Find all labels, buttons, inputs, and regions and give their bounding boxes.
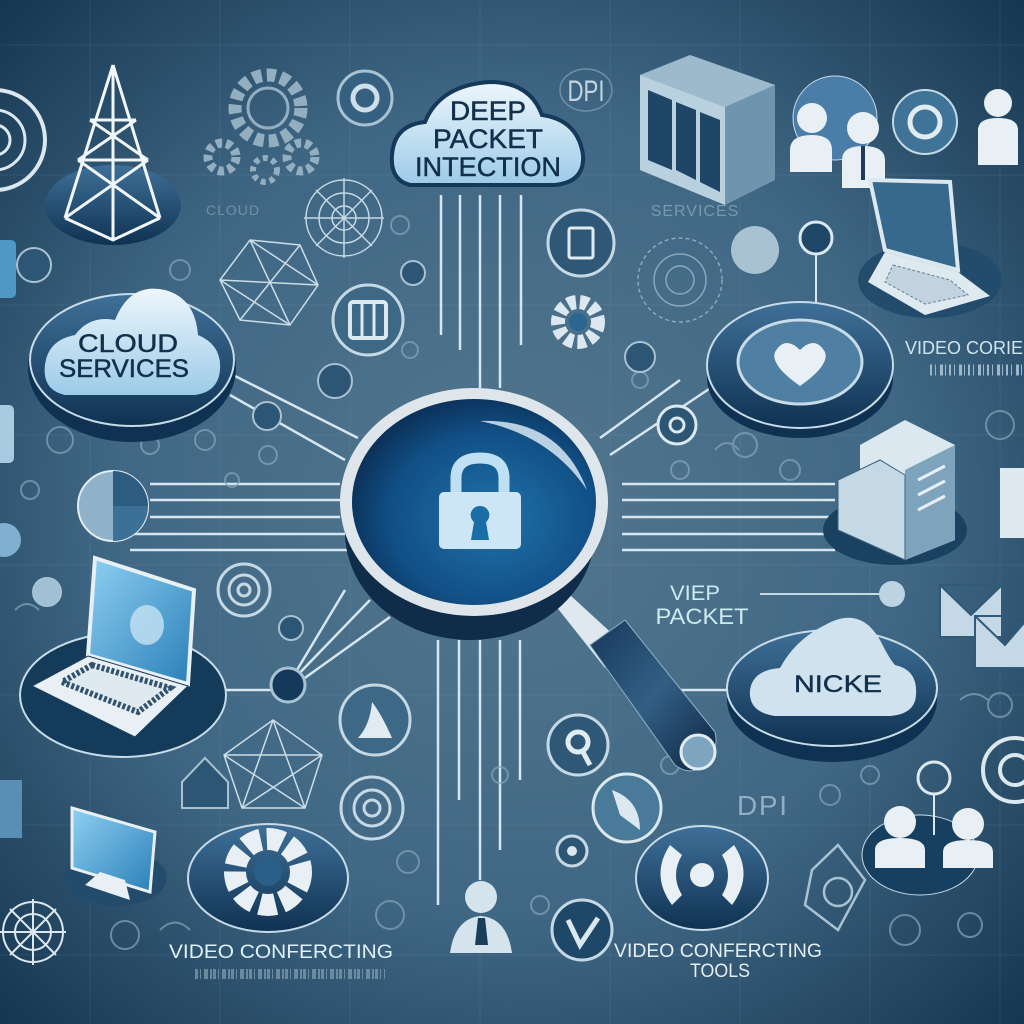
icon: bell badge <box>340 685 410 755</box>
cloud services label: CLOUD <box>78 330 178 358</box>
video conferencing tools label: VIDEO CONFERCTING <box>614 941 822 962</box>
panel: servers top right <box>640 55 775 205</box>
icon: mesh polygon <box>224 720 322 808</box>
icon: lock medallion <box>805 845 865 930</box>
panel: heart disc <box>707 302 893 438</box>
title: INTECTION <box>415 152 561 182</box>
magnifier handle <box>555 595 716 771</box>
icon: left edge tiles <box>0 240 22 838</box>
connector lines <box>130 195 835 905</box>
cloud services label <box>59 330 189 383</box>
icon: bottom circle <box>552 900 612 960</box>
panel: broadcast disc <box>636 826 768 930</box>
icon: round badge <box>338 71 392 125</box>
icon: web left bottom <box>0 899 66 965</box>
panel: cloud services <box>28 289 236 442</box>
panel: gear disc <box>188 824 348 932</box>
icon: house <box>182 758 228 808</box>
magnifier lens <box>352 399 596 605</box>
icon: DPI badge <box>560 69 612 111</box>
faded label video conferencing: VIDEO CORIE <box>905 338 1023 358</box>
icon: location pin badge <box>658 406 696 444</box>
icon: monitor <box>63 808 167 906</box>
icon: globe with people <box>790 76 885 188</box>
icon: signal rings <box>0 90 45 190</box>
faded label deep packet <box>656 582 748 629</box>
icon: web network <box>304 178 384 258</box>
magnifier base shadow <box>345 424 595 640</box>
icon: gears cluster <box>208 75 315 182</box>
icon: camera badge <box>893 90 957 154</box>
cloud services label: SERVICES <box>59 355 189 383</box>
title: DEEP <box>450 96 526 126</box>
icon: person <box>978 89 1018 165</box>
icon: faded DPI: DPI <box>737 790 787 821</box>
icon: transmission tower <box>45 65 181 245</box>
icon: target right <box>983 738 1024 802</box>
icon: fingerprint network <box>638 238 722 322</box>
icon: server stack right <box>823 420 967 565</box>
icon: person bottom <box>450 881 512 953</box>
central magnifying glass with padlock <box>340 388 716 771</box>
faded label cloud: CLOUD <box>206 202 260 218</box>
icon: padlock <box>439 458 521 549</box>
nicke label: NICKE <box>794 671 882 698</box>
video conferencing tools label: TOOLS <box>690 961 750 982</box>
faint doodle icons <box>15 216 1014 949</box>
icon: node pin <box>760 581 905 607</box>
faded label deep packet: PACKET <box>656 604 748 629</box>
panel: people disc <box>862 762 993 895</box>
icon: globe and pin <box>625 222 832 372</box>
magnifier rim <box>340 388 608 616</box>
icon: laptop left <box>20 558 226 757</box>
icon: envelopes <box>940 585 1024 668</box>
icon: document circle <box>548 210 614 276</box>
panel: deep packet inspection cloud <box>392 82 583 185</box>
video conferencing left label: VIDEO CONFERCTING <box>169 942 393 963</box>
icon: small badges left <box>17 248 425 702</box>
faded label deep packet: VIEP <box>670 582 720 605</box>
video conferencing tools label <box>614 941 822 982</box>
illegible faded caption strokes <box>930 364 1022 376</box>
faded label services: SERVICES <box>651 203 739 220</box>
icon: pie chart <box>78 471 148 541</box>
icon: small badge <box>557 836 587 866</box>
icon: globe badge <box>593 774 661 842</box>
icon: spiral badge <box>218 564 270 616</box>
title <box>415 96 561 182</box>
illegible faded caption strokes <box>195 969 385 979</box>
icon: fingerprint badge <box>341 777 403 839</box>
icon: laptop top right <box>858 180 1002 318</box>
icon: document badge <box>333 285 403 355</box>
icon: polygon network <box>220 240 318 325</box>
icon: gear <box>558 302 598 342</box>
icon: search badges <box>548 715 608 775</box>
icon: DPI badge: DPI <box>568 75 604 108</box>
title: PACKET <box>433 124 543 154</box>
panel: cloud nicke <box>727 618 937 762</box>
icon: document <box>1000 468 1024 538</box>
lens highlight <box>480 421 587 490</box>
